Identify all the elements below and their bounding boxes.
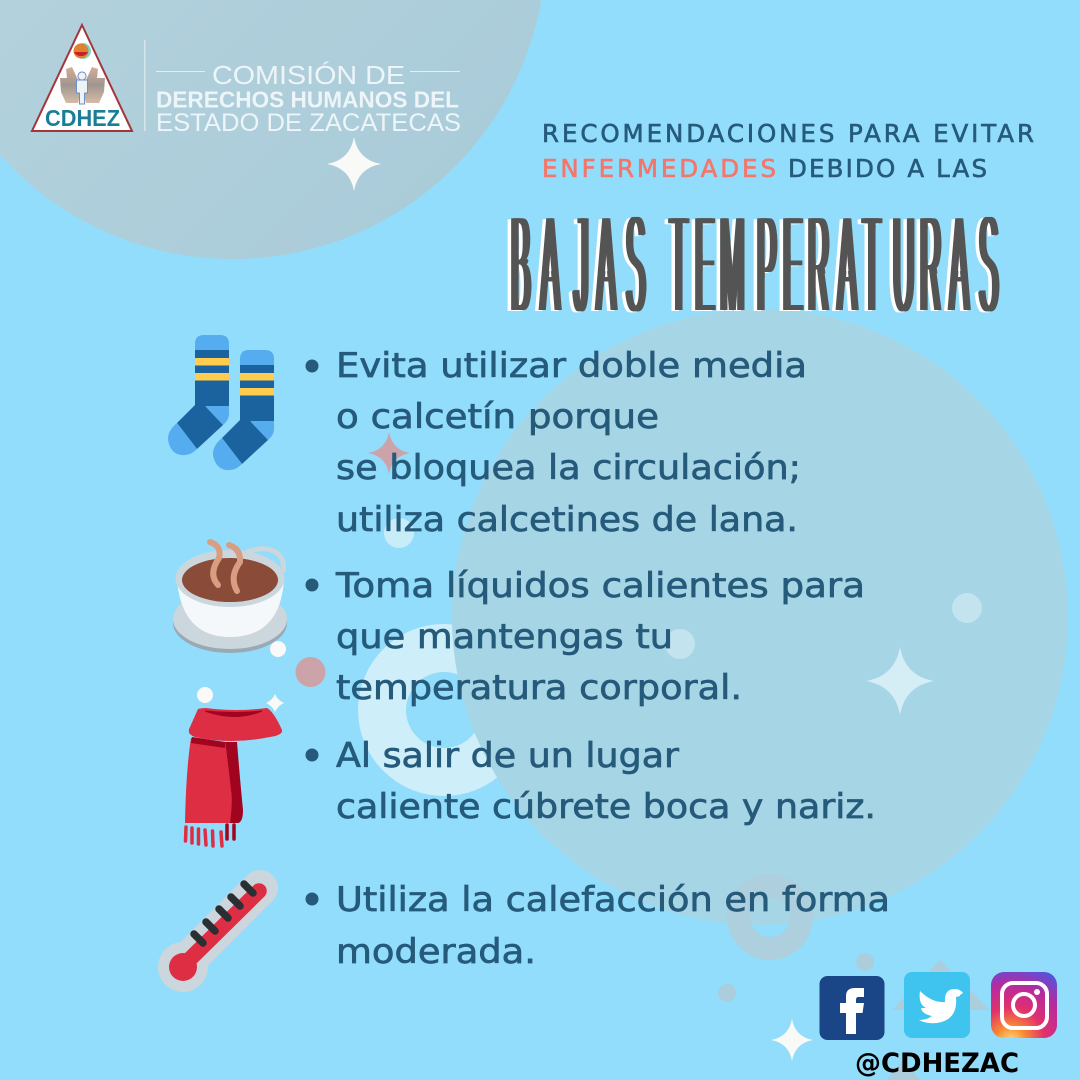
recommendation 1: utiliza calcetines de lana.: [336, 500, 798, 540]
icon: coffee cup: [173, 542, 287, 653]
decor: big circle: [452, 309, 1068, 925]
recommendation 2: temperatura corporal.: [336, 668, 742, 708]
recommendation 1: [306, 346, 807, 540]
recommendation 1: se bloquea la circulación;: [336, 448, 801, 488]
recommendation 4: [306, 880, 890, 972]
logo: institution name: [144, 40, 461, 137]
decor: small shapes: [197, 137, 990, 1080]
heading: subtitle: [542, 119, 1034, 183]
icon: socks: [168, 335, 274, 470]
title: BAJAS TEMPERATURAS: [511, 184, 998, 343]
recommendation 2: [306, 566, 865, 708]
icon: red scarf: [185, 708, 282, 846]
logo: institution name: DERECHOS HUMANOS DEL: [156, 86, 459, 112]
heading: subtitle: DEBIDO A LAS: [788, 154, 987, 183]
heading: subtitle: RECOMENDACIONES PARA EVITAR: [542, 119, 1034, 148]
icon: instagram: [991, 972, 1057, 1038]
recommendation 3: [306, 736, 876, 827]
social handle: @CDHEZAC: [855, 1048, 1019, 1079]
recommendation 2: que mantengas tu: [336, 617, 673, 657]
logo: institution name: ESTADO DE ZACATECAS: [156, 109, 461, 137]
icon: twitter: [904, 972, 970, 1038]
icon: thermometer: [158, 884, 260, 992]
decor: bottom ring: [727, 874, 813, 960]
heading: subtitle: ENFERMEDADES: [542, 154, 776, 183]
recommendation 1: o calcetín porque: [336, 397, 659, 437]
recommendation 4: moderada.: [336, 932, 536, 972]
logo: CDHEZ triangle: [32, 25, 132, 131]
sock right: [213, 350, 274, 470]
recommendation 3: caliente cúbrete boca y nariz.: [336, 787, 876, 827]
sock left: [168, 335, 229, 455]
recommendation 2: Toma líquidos calientes para: [335, 566, 865, 606]
logo: CDHEZ triangle: CDHEZ: [45, 105, 120, 131]
recommendation 4: Utiliza la calefacción en forma: [336, 880, 890, 920]
icon: facebook: [820, 976, 884, 1040]
recommendation 1: Evita utilizar doble media: [336, 346, 807, 386]
decor: light ring: [358, 624, 530, 796]
logo: institution name: COMISIÓN DE: [212, 60, 405, 90]
recommendation 3: Al salir de un lugar: [336, 736, 679, 776]
decor: top-left circle: [0, 0, 546, 259]
